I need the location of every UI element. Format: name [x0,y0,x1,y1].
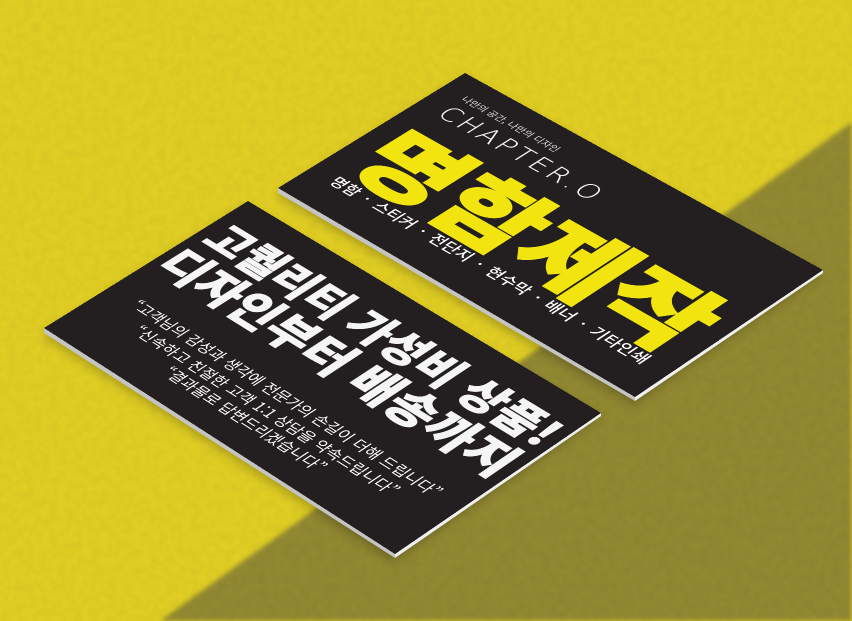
quote line 1: “고객님의 감성과 생각에 전문가의 손길이 더해 드립니다” [125,296,449,500]
main title: 명함제작 [319,107,765,370]
headline line 2: 디자인부터 배송까지 [141,237,542,487]
card: upper business card [278,73,823,397]
tagline: 나만의 공간, 나만의 디자인 [458,94,565,154]
quote line 3: “결과물로 답변드리겠습니다” [157,363,333,475]
card: lower business card [44,201,601,554]
headline line 1: 고퀄리티 가성비 상품! [189,214,583,455]
brand name: CHAPTER.O [430,103,613,206]
quote line 2: “신속하고 친절한 고객 1:1 상담을 약속드립니다” [127,322,406,499]
services list: 명함 · 스티커 · 전단지 · 현수막 · 배너 · 기타인쇄 [324,173,658,367]
